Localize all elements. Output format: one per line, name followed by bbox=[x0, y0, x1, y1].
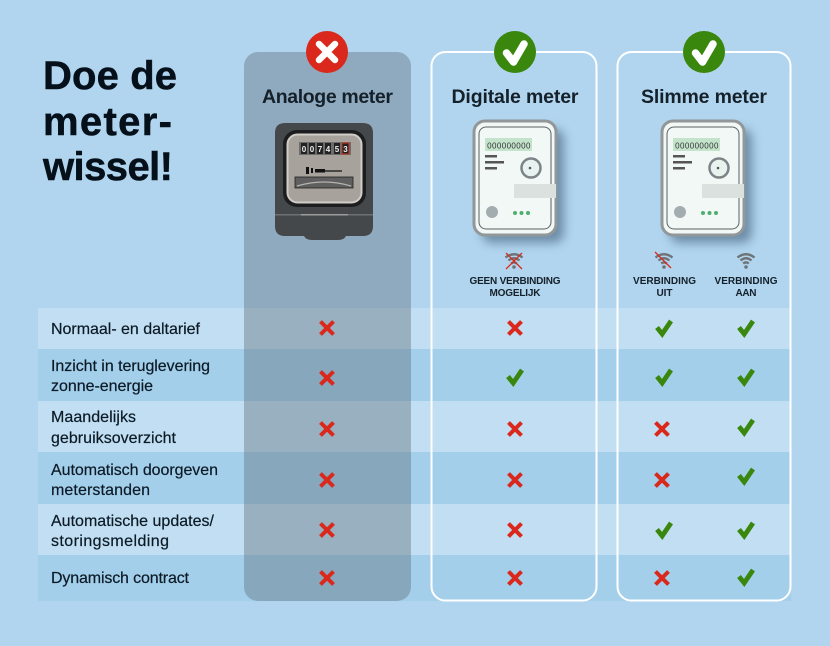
row labels: Automatisch doorgeven bbox=[51, 462, 218, 479]
row labels: Dynamisch contract bbox=[51, 570, 190, 587]
icon: analog meter: 5 bbox=[335, 145, 340, 154]
icon: green check badge slim bbox=[683, 31, 725, 73]
icon: analog meter: 4 bbox=[326, 145, 331, 154]
icon: analog meter: 0 bbox=[302, 145, 307, 154]
title: wissel! bbox=[42, 145, 173, 189]
icon: wifi off bbox=[655, 252, 672, 269]
comparison rows background bbox=[38, 308, 791, 601]
label: verbinding aan: VERBINDING bbox=[714, 276, 778, 287]
icon: wifi on bbox=[738, 254, 754, 269]
icon: analog meter: 0 bbox=[310, 145, 315, 154]
marks: digitale meter column bbox=[508, 322, 522, 584]
icon: no connection bbox=[506, 253, 522, 269]
row labels: gebruiksoverzicht bbox=[51, 430, 177, 447]
icon: red cross badge bbox=[306, 31, 348, 73]
row labels: Maandelijks bbox=[51, 409, 136, 426]
icon: analog meter bbox=[275, 123, 373, 240]
row labels: Automatische updates/ bbox=[51, 513, 215, 530]
heading: digitale meter: Digitale meter bbox=[452, 86, 579, 108]
label: geen verbinding mogelijk: GEEN VERBINDING bbox=[470, 276, 561, 287]
marks: verbinding aan column bbox=[739, 321, 753, 583]
heading: analoge meter: Analoge meter bbox=[262, 86, 393, 108]
label: verbinding aan: AAN bbox=[736, 288, 756, 299]
panel: slimme meter bbox=[618, 52, 790, 600]
marks: analoge meter column bbox=[320, 322, 334, 584]
icon: green check badge digital bbox=[494, 31, 536, 73]
icon: analog meter: 3 bbox=[343, 145, 348, 154]
marks: verbinding uit column bbox=[656, 321, 671, 584]
title: meter- bbox=[43, 100, 172, 144]
icon: smart meter bbox=[662, 121, 752, 243]
icon: analog meter: 7 bbox=[318, 145, 323, 154]
panel: analoge meter bbox=[244, 52, 411, 601]
label: verbinding uit: VERBINDING bbox=[633, 276, 696, 287]
icon: digital meter bbox=[474, 121, 564, 243]
row labels: Normaal- en daltarief bbox=[51, 321, 201, 338]
row labels: zonne-energie bbox=[51, 378, 153, 395]
heading: slimme meter: Slimme meter bbox=[641, 86, 767, 108]
row labels: Inzicht in teruglevering bbox=[51, 358, 210, 375]
title: Doe de bbox=[43, 54, 177, 98]
row labels: storingsmelding bbox=[51, 533, 169, 550]
label: verbinding uit: UIT bbox=[656, 288, 672, 299]
label: geen verbinding mogelijk: MOGELIJK bbox=[490, 288, 541, 299]
panel: digitale meter bbox=[432, 52, 596, 600]
row labels: meterstanden bbox=[51, 482, 150, 499]
